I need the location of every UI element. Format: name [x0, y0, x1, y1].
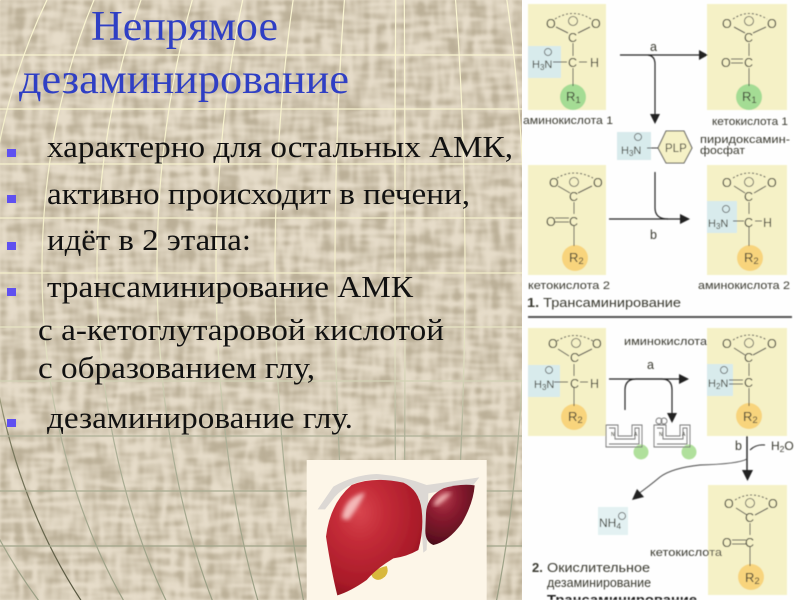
liver illustration: [307, 460, 487, 600]
molecule: amino acid 1: 3: [540, 63, 545, 72]
molecule: amino acid 2: 2: [753, 256, 759, 267]
bullet 4: [7, 269, 444, 385]
molecule: imino acid: O: [767, 337, 777, 351]
section 1: transamination: [523, 4, 790, 310]
molecule: amino acid 1: O: [591, 17, 601, 31]
molecule: keto acid: C: [745, 511, 754, 525]
molecule: keto acid: O: [722, 536, 732, 550]
molecule: amino acid R2: 2: [577, 415, 583, 426]
molecule: imino acid: N: [720, 378, 728, 390]
molecule: amino acid 2: H: [763, 216, 772, 230]
PLP pyridoxamine phosphate: фосфат: [700, 145, 745, 157]
molecule: imino acid: C: [744, 351, 753, 365]
molecule: amino acid 2: C: [744, 216, 753, 230]
white diagram panel: [522, 0, 800, 600]
molecule: amino acid 2: [707, 165, 787, 275]
molecule: keto acid 1: 1: [751, 95, 757, 106]
molecule: amino acid 2: H: [708, 218, 716, 230]
biochemical diagram: [523, 4, 794, 600]
molecule: amino acid 2: O: [722, 176, 732, 190]
arrow a: [620, 40, 708, 124]
section divider: [528, 316, 792, 318]
molecule: amino acid R2: R: [568, 409, 577, 424]
gallbladder: [371, 566, 388, 580]
molecule: keto acid 2: [528, 165, 606, 275]
molecule: amino acid 2: R: [744, 250, 753, 265]
molecule: imino acid: O: [722, 337, 732, 351]
arrow b: [609, 172, 690, 242]
heading: oxidative deamination: дезаминирование: [547, 575, 651, 590]
PLP pyridoxamine phosphate: [617, 131, 790, 163]
molecule: amino acid R2: 3: [542, 383, 547, 392]
highlights: [342, 493, 365, 520]
molecule: keto acid 2: R: [569, 250, 578, 265]
molecule: keto acid: O: [724, 497, 734, 511]
molecule: keto acid 1: O: [721, 56, 731, 70]
label: amino acid 1: аминокислота 1: [523, 115, 613, 127]
bullet 4: трансаминирование АМК: [47, 269, 413, 304]
molecule: keto acid: 2: [754, 576, 760, 587]
left lobe: [425, 485, 475, 545]
molecule: imino acid: 2: [716, 382, 721, 391]
heading: transamination: 1. Трансаминирование: [527, 296, 681, 310]
coenzyme FAD left: A: [634, 432, 638, 438]
molecule: amino acid 1: 1: [575, 95, 581, 106]
molecule: amino acid R2: [528, 328, 606, 436]
bullet 3: идёт в 2 этапа:: [47, 222, 251, 257]
PLP pyridoxamine phosphate: H: [621, 145, 629, 157]
molecule: amino acid R2: C: [570, 377, 579, 391]
coenzyme FADH2 right: A: [682, 432, 686, 438]
molecule: amino acid 1: H: [532, 59, 540, 71]
coenzyme FADH2 right: N: [659, 432, 663, 438]
molecule: amino acid 1: R: [566, 89, 575, 104]
PLP pyridoxamine phosphate: пиридоксамин-: [700, 134, 790, 146]
arrow a: a: [650, 40, 657, 54]
bullet 4: с а-кетоглутаровой кислотой: [38, 312, 444, 347]
molecule: amino acid 2: N: [720, 218, 728, 230]
molecule: amino acid 2: C: [744, 190, 753, 204]
molecule: amino acid 1: C: [568, 56, 577, 70]
arrow b with water: b: [735, 439, 742, 453]
molecule: keto acid 2: O: [549, 176, 559, 190]
molecule: amino acid 2: 3: [716, 222, 721, 231]
molecule: keto acid 1: R: [742, 89, 751, 104]
label: keto acid 1: кетокислота 1: [712, 116, 788, 128]
ammonium NH4+: 4: [616, 521, 621, 531]
heading: oxidative deamination: [532, 560, 651, 590]
molecule: amino acid R2: N: [546, 379, 554, 391]
label: keto acid: кетокислота: [650, 547, 723, 559]
arrow a with coenzyme: a: [647, 358, 654, 372]
molecule: keto acid 1: [707, 4, 787, 110]
molecule: amino acid 1: N: [544, 59, 552, 71]
right lobe: [326, 480, 422, 595]
bullet 2: активно происходит в печени,: [47, 176, 470, 211]
molecule: amino acid 1: C: [568, 31, 577, 45]
PLP pyridoxamine phosphate: PLP: [665, 143, 687, 155]
molecule: amino acid R2: C: [570, 351, 579, 365]
molecule: imino acid: C: [744, 376, 753, 390]
bullet list: [7, 129, 513, 435]
molecule: keto acid 2: C: [569, 215, 578, 229]
section 2: oxidative deamination: [528, 328, 794, 600]
coenzyme FADH2 right: [654, 418, 696, 460]
arrow b with water: [632, 436, 794, 500]
molecule: amino acid R2: H: [590, 377, 599, 391]
molecule: keto acid: O: [768, 497, 778, 511]
molecule: amino acid 1: [528, 4, 606, 110]
molecule: amino acid R2: H: [534, 379, 542, 391]
label: amino acid 2: аминокислота 2: [698, 280, 790, 292]
molecule: amino acid 2: O: [767, 176, 777, 190]
arrow b with water: 2: [780, 444, 785, 454]
PLP pyridoxamine phosphate: N: [633, 145, 641, 157]
label: keto acid 2: кетокислота 2: [528, 280, 610, 292]
molecule: keto acid 1: C: [744, 56, 753, 70]
molecule: keto acid: [708, 485, 787, 595]
molecule: amino acid R2: O: [592, 337, 602, 351]
molecule: keto acid 1: O: [722, 17, 732, 31]
molecule: amino acid 1: O: [546, 17, 556, 31]
molecule: keto acid 2: C: [569, 190, 578, 204]
molecule: imino acid: [707, 328, 787, 436]
heading: oxidative deamination: 2.: [532, 560, 543, 575]
molecule: amino acid R2: O: [548, 337, 558, 351]
title: Непрямое: [91, 4, 278, 50]
molecule: keto acid 1: O: [767, 17, 777, 31]
arrow b with water: O: [784, 439, 794, 453]
molecule: keto acid: C: [745, 536, 754, 550]
title: [19, 4, 349, 103]
PLP pyridoxamine phosphate: 3: [629, 149, 634, 158]
membrane: [318, 474, 479, 553]
arrow b: b: [650, 228, 657, 242]
molecule: imino acid: 2: [752, 415, 758, 426]
heading: oxidative deamination: Окислительное: [547, 560, 650, 575]
molecule: keto acid 2: 2: [578, 256, 584, 267]
arrow a with coenzyme: [609, 358, 689, 423]
ammonium NH4+: NH: [599, 516, 616, 530]
ammonium NH4+: [598, 507, 628, 535]
coenzyme FAD left: N: [611, 432, 615, 438]
arrow b with water: H: [771, 439, 780, 453]
molecule: imino acid: H: [708, 378, 716, 390]
molecule: keto acid: R: [745, 570, 754, 585]
molecule: imino acid: R: [743, 409, 752, 424]
molecule: keto acid 2: O: [546, 215, 556, 229]
bullet 1: характерно для остальных АМК,: [47, 129, 513, 164]
bullet 5: дезаминирование глу.: [47, 400, 353, 435]
molecule: keto acid 1: C: [744, 31, 753, 45]
label: imino acid: иминокислота: [624, 336, 708, 348]
molecule: keto acid 2: O: [593, 176, 603, 190]
molecule: amino acid 1: H: [590, 56, 599, 70]
title: дезаминирование: [19, 57, 349, 103]
coenzyme FAD left: [606, 425, 648, 460]
bullet 4: с образованием глу,: [38, 350, 315, 385]
